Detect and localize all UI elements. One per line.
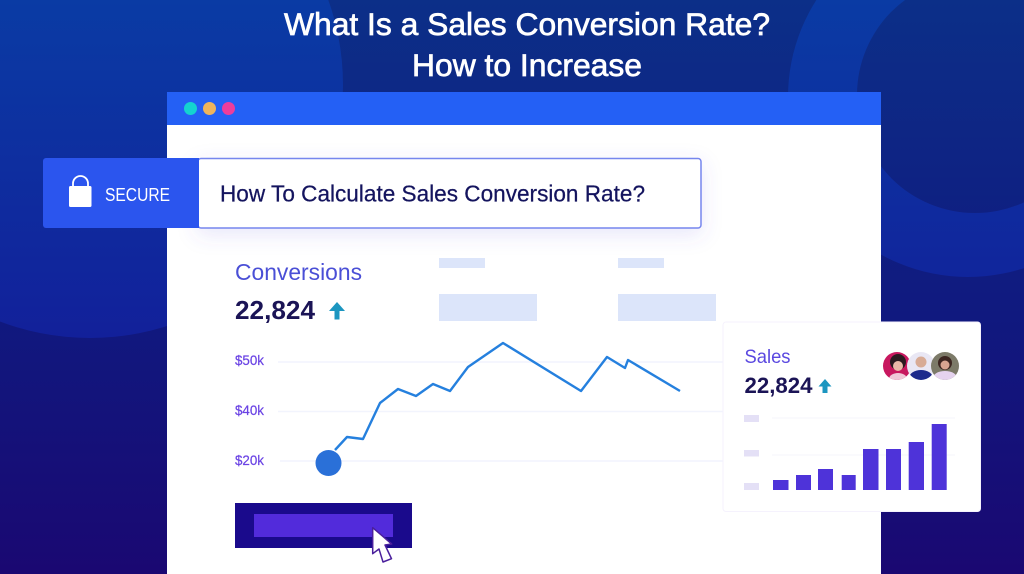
conversions value: 22,824: [235, 295, 316, 325]
icon: padlock: [69, 176, 92, 207]
search bar: How To Calculate Sales Conversion Rate?: [220, 180, 645, 206]
sales heading: Sales: [744, 346, 791, 368]
button: [235, 503, 412, 548]
line chart: $40k: [235, 403, 264, 418]
placeholder blocks: [439, 258, 716, 321]
avatars: [883, 352, 959, 380]
conversions heading: Conversions: [235, 259, 362, 285]
title: [284, 6, 770, 83]
search bar: [43, 158, 701, 228]
icon: up arrow: [329, 302, 345, 320]
line chart: $50k: [235, 353, 264, 368]
search bar: SECURE: [105, 185, 170, 205]
title: How to Increase: [412, 47, 642, 83]
sales value: 22,824: [744, 373, 813, 398]
title: What Is a Sales Conversion Rate?: [284, 6, 770, 42]
bar chart: [744, 415, 955, 490]
panel: browser window: [167, 92, 881, 574]
line chart: $20k: [235, 453, 264, 468]
icon: small up arrow: [818, 379, 832, 393]
icon: mouse cursor: [373, 528, 392, 562]
line chart: [235, 343, 723, 476]
panel: sales card: [723, 322, 980, 512]
